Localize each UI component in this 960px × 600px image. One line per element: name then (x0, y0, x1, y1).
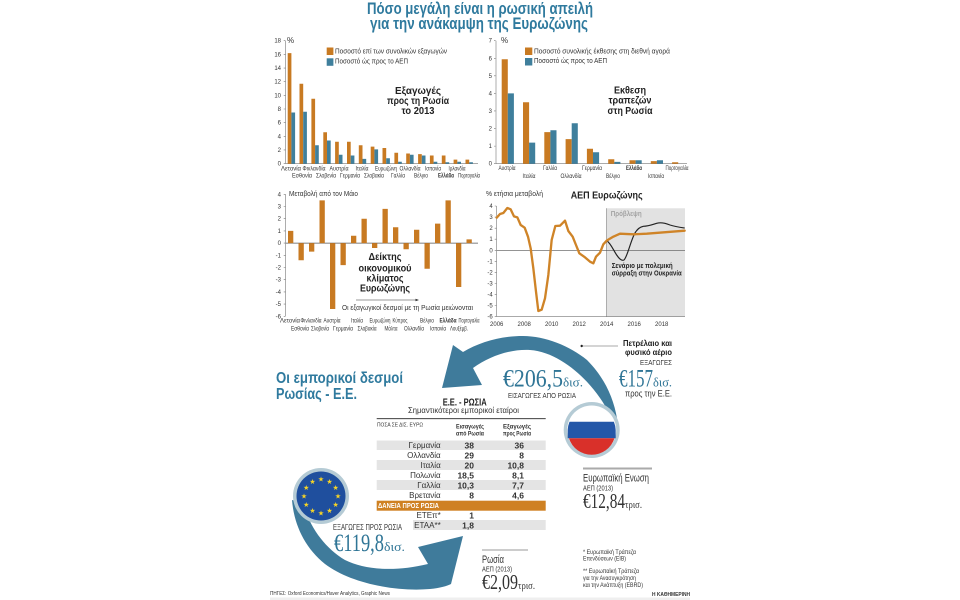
icon: EU flag: ★ (309, 478, 316, 486)
callout: oil and gas exports (580, 338, 673, 399)
table: main trade partners: 4,6 (512, 490, 524, 500)
callout: exports to Russia: €119,8 (334, 530, 384, 557)
chart: Eurozone economic sentiment index: 3 (278, 204, 282, 210)
chart: Eurozone GDP line chart: -5 (487, 304, 493, 310)
chart heading: οικονομικού (358, 263, 412, 275)
chart: exports to Russia 2013: 10 (274, 93, 282, 99)
country labels: Αυστρία (330, 167, 349, 173)
footnotes: και την Ανάπτυξη (EBRD) (583, 582, 643, 589)
table: main trade partners: Ιταλία (420, 461, 441, 470)
callout: oil and gas exports: φυσικό αέριο (625, 347, 672, 357)
country labels: Ελλάδα (440, 319, 457, 325)
chart: Eurozone economic sentiment index: -3 (276, 278, 282, 284)
country labels: Ιρλανδία (448, 167, 466, 173)
chart heading: Εκθεση (614, 84, 646, 96)
chart heading: στη Ρωσία (608, 105, 653, 117)
country labels: Γερμανία (333, 327, 353, 333)
chart: Eurozone economic sentiment index: 4 (278, 192, 282, 198)
chart: Eurozone economic sentiment index: -1 (276, 253, 282, 259)
table: main trade partners: Εισαγωγές (456, 423, 485, 430)
chart: exports to Russia 2013: 8 (278, 107, 282, 113)
chart: Eurozone economic sentiment index: 0 (278, 241, 282, 247)
country labels: Γερμανία (340, 174, 360, 180)
chart: Eurozone GDP line chart: -6 (487, 315, 493, 321)
table: main trade partners: 18,5 (457, 470, 474, 480)
table: main trade partners: 8 (469, 490, 474, 500)
country labels: Ιταλία (356, 167, 369, 173)
stat: Russia GDP: Ρωσία (482, 554, 504, 566)
chart: Eurozone GDP line chart: 2016 (628, 322, 642, 328)
chart heading: ΑΕΠ Ευρωζώνης (571, 189, 643, 201)
country labels: Σλοβακία (364, 174, 384, 180)
chart: exports to Russia 2013: 4 (278, 134, 282, 140)
country labels: Κύπρος (392, 319, 408, 325)
table: main trade partners: ΕΤΕπ* (416, 511, 441, 520)
table: main trade partners: 10,3 (457, 480, 474, 490)
chart: Eurozone GDP line chart: 2010 (545, 322, 559, 328)
country labels (498, 166, 689, 180)
callout: oil and gas exports: Πετρέλαιο και (623, 338, 673, 348)
footnotes: ** Ευρωπαϊκή Τράπεζα (583, 568, 639, 575)
icon: EU flag: ★ (326, 507, 333, 515)
table: main trade partners: Ολλανδία (407, 451, 441, 460)
chart: Eurozone GDP line chart: 2018 (655, 322, 669, 328)
chart: Eurozone GDP line chart: -1 (487, 259, 493, 265)
country labels: Ολλανδία (560, 174, 582, 180)
bars: share of GDP (291, 112, 473, 164)
table: main trade partners: 7,7 (512, 480, 524, 490)
country labels: Ισπανία (430, 327, 446, 333)
title (367, 0, 593, 33)
country labels: Σλοβακία (358, 327, 377, 333)
chart: bank exposure to Russia (489, 36, 689, 180)
chart heading: Εξαγωγές (395, 85, 441, 97)
icon: EU flag: ★ (318, 476, 324, 484)
arrow and note: export ties weaken (342, 299, 473, 312)
chart: exports to Russia 2013: 14 (274, 66, 282, 72)
table: main trade partners: 1 (469, 510, 474, 520)
callout: oil and gas exports: ΕΞΑΓΩΓΕΣ (640, 360, 673, 367)
stat: Russia GDP: €2,09 (482, 570, 518, 594)
country labels (281, 167, 480, 180)
table: main trade partners: Πολωνία (410, 471, 441, 480)
country labels: Σλοβενία (311, 327, 329, 333)
icon: EU flag: ★ (318, 510, 324, 518)
table: main trade partners: 8,1 (512, 470, 524, 480)
bars: share of total international exposure (502, 59, 678, 164)
chart: Eurozone GDP line chart: -4 (487, 293, 493, 299)
legend: Ποσοστό ώς προς το ΑΕΠ (335, 58, 408, 66)
legend: Ποσοστό συνολικής έκθεσης στη διεθνή αγορά (534, 47, 670, 55)
country labels: Πορτογαλία (666, 166, 689, 172)
chart: Eurozone economic sentiment index: -5 (276, 302, 282, 308)
chart: Eurozone economic sentiment index: -4 (276, 290, 282, 296)
stat: EU GDP: Ευρωπαϊκή Ενωση (583, 473, 649, 485)
chart: Eurozone GDP line chart: 1 (489, 237, 493, 243)
icon: EU flag: ★ (303, 484, 309, 492)
chart: bank exposure to Russia: % (501, 36, 508, 45)
stat: Russia GDP: τρισ. (518, 580, 535, 592)
axis unit: % ετήσια μεταβολή (486, 191, 543, 198)
arrow: exports to Russia (292, 500, 463, 590)
country labels: Ελλάδα (438, 174, 454, 180)
footnotes: για την Ανασυγκρότηση (583, 575, 636, 582)
stat: EU GDP: τρισ. (625, 499, 642, 511)
callout: oil and gas exports: δισ. (653, 375, 672, 390)
country labels: Ιταλία (522, 174, 536, 180)
chart heading: προς τη Ρωσία (387, 95, 449, 107)
stat: EU GDP (583, 468, 652, 513)
chart: Eurozone GDP line chart: 0 (489, 248, 493, 254)
chart: exports to Russia 2013: 18 (274, 39, 282, 45)
table: main trade partners: ΠΟΣΑ ΣΕ ΔΙΣ. ΕΥΡΩ (377, 423, 423, 429)
chart: bank exposure to Russia: 6 (489, 56, 493, 62)
country labels: Μάλτα (384, 326, 398, 333)
chart heading (608, 84, 653, 117)
country labels: Βέλγιο (420, 318, 435, 325)
table: main trade partners: 10,8 (507, 460, 524, 470)
country labels: Γαλλία (391, 174, 405, 180)
footnotes: * Ευρωπαϊκή Τράπεζα (583, 549, 636, 556)
icon: EU flag: ★ (333, 501, 339, 509)
callout: exports to Russia: ΕΞΑΓΩΓΕΣ ΠΡΟΣ ΡΩΣΙΑ (333, 523, 402, 532)
chart: Eurozone GDP line chart: 2008 (518, 322, 532, 328)
country labels: Λετονία (281, 167, 302, 173)
country labels: Φινλανδία (302, 167, 326, 173)
callout: imports from Russia: δισ. (563, 375, 583, 390)
chart: Eurozone GDP line chart: 2006 (490, 322, 504, 328)
arrow and note: export ties weaken: Οι εξαγωγικοί δεσμοί με τη Ρωσία μειώνονται (342, 304, 473, 312)
publisher credit: Η ΚΑΘΗΜΕΡΙΝΗ (652, 592, 690, 598)
country labels: Εσθονία (291, 327, 309, 333)
chart: Eurozone GDP line chart: -2 (487, 270, 493, 276)
country labels: Πορτογαλία (458, 174, 480, 180)
chart: bank exposure to Russia: 2 (489, 127, 493, 133)
country labels: Ολλανδία (404, 327, 424, 333)
scenario note: σύρραξη στην Ουκρανία (612, 271, 682, 278)
legend: Ποσοστό επί των συνολικών εξαγωγών (335, 47, 447, 55)
scenario note: Σενάριο με πολεμική (612, 262, 673, 270)
legend (327, 47, 447, 66)
country labels: Πορτογαλία (458, 319, 480, 325)
source line: ΠΗΓΕΣ: Oxford Economics/Haver Analytics, Graphic News (270, 591, 390, 597)
legend (525, 47, 670, 66)
callout: imports from Russia: €206,5 (503, 366, 563, 393)
section heading (276, 370, 403, 403)
icon: EU flag: ★ (326, 478, 333, 486)
chart: bank exposure to Russia: 7 (489, 39, 493, 45)
table: main trade partners: Γερμανία (409, 441, 441, 450)
chart heading: τραπεζών (608, 94, 652, 106)
chart heading (387, 85, 449, 117)
chart: Eurozone GDP line chart: -3 (487, 282, 493, 288)
chart: exports to Russia 2013: 6 (278, 121, 282, 127)
chart: exports to Russia 2013: % (287, 36, 294, 45)
table: main trade partners: ΔΑΝΕΙΑ ΠΡΟΣ ΡΩΣΙΑ (378, 503, 439, 510)
icon: EU flag: ★ (309, 507, 316, 515)
title: για την ανάκαμψη της Ευρωζώνης (370, 14, 588, 33)
callout: imports from Russia: ΕΙΣΑΓΩΓΕΣ ΑΠΟ ΡΩΣΙΑ (508, 393, 576, 400)
callout: oil and gas exports: προς την Ε.Ε. (625, 389, 672, 399)
scenario note (612, 262, 682, 278)
bars: share of total exports (288, 53, 469, 164)
table: main trade partners: Σημαντικότεροι εμπορικοί εταίροι (408, 405, 519, 415)
country labels: Αυστρία (498, 166, 516, 172)
country labels: Βέλγιο (414, 173, 429, 180)
callout: imports from Russia (503, 366, 583, 400)
chart: bank exposure to Russia: 1 (489, 144, 493, 150)
chart: Eurozone GDP line chart: 4 (489, 204, 493, 210)
table: main trade partners: Βρετανία (409, 491, 441, 500)
stat: Russia GDP (482, 550, 535, 594)
country labels: Ισπανία (648, 174, 664, 180)
chart: bank exposure to Russia: 0 (489, 162, 493, 168)
section heading: Ρωσίας - Ε.Ε. (276, 386, 357, 403)
table: main trade partners: 1,8 (462, 520, 474, 530)
chart: exports to Russia 2013: 16 (274, 52, 282, 58)
country labels: Ιταλία (351, 319, 363, 325)
country labels: Ισπανία (425, 167, 441, 173)
country labels: Ελλάδα (626, 166, 642, 172)
chart: Eurozone GDP line chart: 2 (489, 226, 493, 232)
chart: Eurozone GDP line chart: 3 (489, 215, 493, 221)
chart heading: Ευρωζώνης (360, 283, 410, 295)
legend: Ποσοστό ώς προς το ΑΕΠ (534, 57, 607, 65)
table: main trade partners: 38 (465, 440, 474, 450)
table: main trade partners: 29 (465, 450, 474, 460)
chart heading (358, 251, 412, 295)
stat: EU GDP: €12,84 (583, 489, 625, 513)
country labels: Γερμανία (582, 166, 602, 172)
table: main trade partners: από Ρωσία (456, 430, 484, 438)
footnotes (583, 549, 643, 589)
chart: exports to Russia 2013: 0 (278, 162, 282, 168)
country labels: Ευρωζώνη (375, 167, 397, 173)
chart: bank exposure to Russia: 5 (489, 74, 493, 80)
chart: Eurozone GDP line chart: 2012 (573, 322, 587, 328)
bars: exposure as share of GDP (508, 93, 663, 164)
country labels: Βέλγιο (606, 173, 621, 180)
country labels: Λουξέμβ. (450, 326, 468, 333)
forecast label: Πρόβλεψη (611, 210, 642, 218)
country labels: Ολλανδία (400, 167, 421, 173)
callout: oil and gas exports: €157 (619, 366, 653, 393)
chart: exports to Russia 2013: 2 (278, 148, 282, 154)
chart: Eurozone economic sentiment index: Μεταβολή από τον Μάιο (289, 190, 358, 198)
table: main trade partners: προς Ρωσία (503, 430, 531, 438)
chart heading: το 2013 (402, 105, 435, 117)
chart: Eurozone GDP line chart: 2014 (600, 322, 614, 328)
chart heading: κλίματος (366, 273, 404, 285)
line: base forecast (497, 208, 685, 311)
chart: bank exposure to Russia: 4 (489, 91, 493, 97)
chart: Eurozone economic sentiment index: 2 (278, 217, 282, 223)
chart heading: Δείκτης (368, 251, 402, 263)
icon: Russia flag (564, 402, 620, 458)
country labels: Εσθονία (292, 174, 312, 180)
icon: EU flag: ★ (333, 484, 339, 492)
chart: Eurozone economic sentiment index: -6 (276, 314, 282, 320)
icon: EU flag: ★ (301, 492, 307, 500)
stat: EU GDP: ΑΕΠ (2013) (583, 486, 613, 493)
country labels: Γαλλία (543, 166, 557, 172)
callout: exports to Russia: δισ. (384, 539, 405, 554)
footnotes: Επενδύσεων (EIB) (583, 557, 626, 563)
chart: exports to Russia 2013: 12 (274, 80, 282, 86)
table: main trade partners: Εξαγωγές (503, 423, 532, 430)
table: main trade partners: 36 (515, 440, 524, 450)
table: main trade partners: ΕΤΑΑ** (414, 521, 441, 530)
country labels (280, 318, 480, 333)
table: main trade partners: 20 (465, 460, 474, 470)
chart: Eurozone economic sentiment index (276, 190, 480, 333)
chart: exports to Russia 2013 (274, 36, 480, 180)
country labels: Αυστρία (324, 319, 341, 325)
section heading: Οι εμπορικοί δεσμοί (276, 370, 403, 387)
country labels: Φινλανδία (300, 319, 322, 325)
chart: Eurozone economic sentiment index: -2 (276, 266, 282, 272)
icon: EU flag: ★ (335, 492, 341, 500)
bars: change since May (288, 200, 472, 309)
table: main trade partners (377, 398, 546, 530)
arrow: imports from Russia (442, 336, 618, 432)
table: main trade partners: 8 (519, 450, 524, 460)
country labels: Λετονία (280, 319, 301, 325)
table: main trade partners: Γαλλία (417, 481, 441, 490)
table: main trade partners: Ε.Ε. - ΡΩΣΙΑ (443, 398, 487, 409)
chart: Eurozone economic sentiment index: 1 (278, 229, 282, 235)
stat: Russia GDP: ΑΕΠ (2013) (482, 567, 512, 574)
line: conflict scenario (607, 223, 685, 260)
icon: EU flag (293, 468, 349, 524)
chart: bank exposure to Russia: 3 (489, 109, 493, 115)
country labels: Ευρωζώνη (370, 319, 390, 325)
country labels: Σλοβενία (316, 174, 336, 180)
chart: Eurozone GDP line chart (486, 189, 685, 328)
icon: EU flag: ★ (303, 501, 309, 509)
